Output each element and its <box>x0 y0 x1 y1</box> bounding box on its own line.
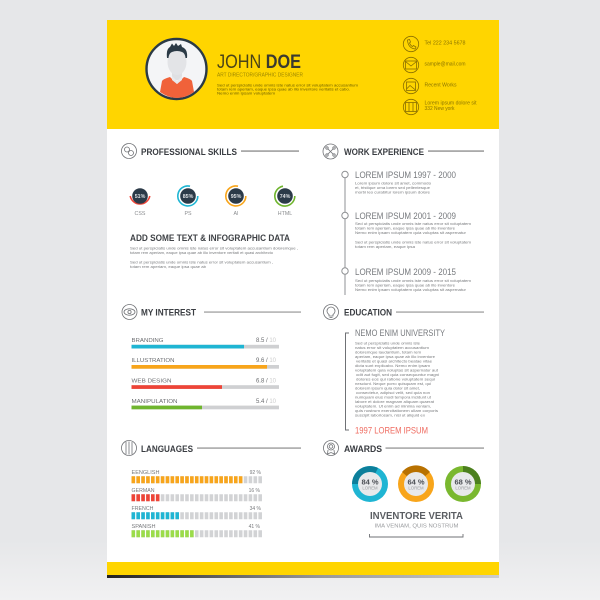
footer band <box>107 562 499 575</box>
education body text: quis nostrum exercitationem ullam corporis <box>355 408 438 413</box>
donut: award 2 <box>398 465 434 502</box>
bracket <box>346 333 349 430</box>
job 1 <box>355 170 456 194</box>
heading: PROFESSIONAL SKILLS <box>141 147 237 158</box>
education body text: dicta sunt explicabo. Nemo enim ipsam <box>355 363 431 368</box>
meter: spanish: SPANISH <box>132 524 156 530</box>
email: sample@mail.com <box>424 62 466 68</box>
donut: award 3 <box>445 466 481 502</box>
intro text <box>217 82 359 96</box>
donut: PS <box>178 186 198 217</box>
education body text: numquam eius modi tempora incidunt ut <box>355 394 432 400</box>
body text: Sed ut perspiciatis unde omnis iste natus error sit voluptatem accusantium doloremque , <box>130 246 298 250</box>
education dates: 1997 LOREM IPSUM <box>355 426 428 436</box>
bar: branding: BRANDING <box>132 338 164 344</box>
panel: awards <box>324 440 484 537</box>
bar: branding <box>132 338 279 348</box>
icon: envelope <box>403 57 419 73</box>
donut: award 1: LOREM <box>362 486 378 490</box>
donut: CSS: 51% <box>135 194 146 200</box>
timeline <box>342 171 348 295</box>
meter: german: GERMAN <box>132 488 155 494</box>
donut: AI <box>226 186 246 217</box>
education body text: dolorem ipsum quia dolor sit amet, <box>355 386 420 390</box>
sub heading: ADD SOME TEXT & INFOGRAPHIC DATA <box>130 233 290 243</box>
education body text: consectetur, adipisci velit, sed quia non <box>356 390 430 395</box>
icon: avatar portrait <box>146 39 206 99</box>
panel: header band <box>107 20 499 129</box>
recent works: Recent Works <box>424 82 457 88</box>
award title: INVENTORE VERITA <box>370 511 463 522</box>
job 2 <box>355 211 472 249</box>
panel: languages <box>122 440 301 534</box>
panel: professional skills <box>122 144 299 269</box>
heading: AWARDS <box>344 444 382 455</box>
panel: resume sheet <box>107 20 499 575</box>
heading: EDUCATION <box>344 308 392 318</box>
address <box>424 100 477 112</box>
donut: award 1 <box>352 466 388 502</box>
icon: map <box>403 99 419 115</box>
panel: education <box>324 304 484 436</box>
body text: Sed ut perspiciatis unde omnis iste natus error sit voluptatem accusantium , <box>130 260 273 264</box>
icon: eye <box>122 304 137 320</box>
donut: HTML <box>275 186 295 217</box>
body text: totam rem aperiam, eaque ipsa quae ab illo inventore veritati et quasi architecto <box>130 250 274 255</box>
panel: my interest <box>122 304 301 409</box>
bar: illustration: 9.6 / 10 <box>256 358 277 364</box>
education body text: aperiam, eaque ipsa quae ab illo inventore <box>355 354 436 359</box>
meter: french: 34 % <box>250 506 262 512</box>
heading: WORK EXPERIENCE <box>344 147 424 158</box>
job subtitle: ART DIRECTOR/GRAPHIC DESIGNER <box>217 72 303 78</box>
donut: AI: AI <box>233 211 239 217</box>
education body text: dolores eos qui ratione voluptatem sequi <box>356 376 435 382</box>
bar: manipulation: 5.4 / 10 <box>256 399 277 405</box>
meter: french <box>132 506 263 516</box>
bar: web design: 6.8 / 10 <box>256 378 277 384</box>
donut: PS: PS <box>184 211 192 217</box>
job 3: Sed ut perspiciatis unde omnis iste natus error sit voluptatem <box>355 278 472 283</box>
award subtitle: IMA VENIAM, QUIS NOSTRUM <box>374 524 459 530</box>
donut: award 2: LOREM <box>408 486 424 490</box>
job 3 <box>355 267 472 292</box>
meter: english: EENGLISH <box>132 470 160 476</box>
bar: manipulation <box>132 399 279 409</box>
icon: phone <box>403 36 419 52</box>
job 2: totam rem aperiam, eaque ipsa quae ab illo inventore <box>355 226 456 230</box>
meter: spanish <box>132 524 263 534</box>
job 2: Sed ut perspiciatis unde omnis iste natus error sit voluptatem <box>355 240 472 244</box>
education body text: odit aut fugit, sed quia consequuntur magni <box>356 372 439 377</box>
body text <box>130 246 298 269</box>
education body text: natus error sit voluptatem accusantium <box>355 345 430 350</box>
bar: illustration <box>132 358 279 369</box>
donut: HTML: HTML <box>278 211 292 217</box>
heading: MY INTEREST <box>141 308 196 318</box>
intro text: totam rem aperiam, eaque ipsa quae ab illo inventore veritatis et cabo. <box>217 86 350 92</box>
job 3: Nemo enim ipsam voluptatem quia voluptas sit aspernatur <box>355 287 467 292</box>
education body text: voluptatem quia voluptas sit aspernatur aut <box>355 368 439 372</box>
address: Lorem ipsum dolore sit <box>424 100 477 106</box>
panel: work experience <box>323 144 484 295</box>
job 2: Nemo enim ipsam voluptatem quia voluptas sit aspernatur <box>355 230 467 235</box>
meter: german <box>132 488 263 498</box>
name title: JOHN DOE <box>217 52 301 73</box>
heading: LANGUAGES <box>141 444 193 455</box>
donut: award 1: 84 % <box>361 478 379 486</box>
education body text: doloremque laudantium, totam rem <box>355 350 422 354</box>
education body text: veritatis et quasi architecto beatae vitae <box>356 358 433 364</box>
job 1: morbi leo curabitur lorem ipsum dolore <box>355 190 431 194</box>
icon: picture <box>403 78 419 94</box>
phone number: Tel 222 234 5678 <box>424 40 466 46</box>
bar: branding: 8.5 / 10 <box>256 338 277 344</box>
donut: PS: 85% <box>183 194 194 200</box>
bracket <box>370 534 463 537</box>
bar: illustration: ILLUSTRATION <box>132 358 175 364</box>
job 3: totam rem aperiam, eaque ipsa quae ab illo inventore <box>355 282 456 288</box>
job 2: Sed ut perspiciatis unde omnis iste natus error sit voluptatem <box>355 221 472 226</box>
education body text: nesciunt. Neque porro quisquam est, qui <box>355 381 431 386</box>
icon: ribbon <box>324 440 338 456</box>
meter: english: 92 % <box>250 470 262 476</box>
donut: CSS: CSS <box>135 211 146 217</box>
education body text: labore et dolore magnam aliquam quaerat <box>355 399 435 404</box>
icon: gears <box>122 144 136 158</box>
job 2: LOREM IPSUM 2001 - 2009 <box>355 211 456 222</box>
donut: CSS <box>130 188 150 217</box>
education body text <box>355 340 439 418</box>
icon: network <box>323 144 338 159</box>
icon: columns <box>122 440 136 456</box>
intro text: Nemo enim ipsam voluptatem <box>217 90 276 96</box>
meter: french: FRENCH <box>132 506 154 512</box>
bar: manipulation: MANIPULATION <box>132 399 178 405</box>
address: 332 New york <box>424 106 455 112</box>
education body text: suscipit laboriosam, nisi ut aliquid ex <box>355 412 425 418</box>
job 1: Lorem ipsum dolore sit amet, commodo <box>355 180 432 186</box>
meter: german: 16 % <box>249 488 261 494</box>
job 1: et, tristique urna lorem sed pellentesque <box>355 185 431 190</box>
donut: award 3: 68 % <box>454 478 472 486</box>
icon: light bulb <box>324 304 338 320</box>
meter: spanish: 41 % <box>249 524 261 530</box>
job 1: LOREM IPSUM 1997 - 2000 <box>355 170 456 181</box>
donut: award 3: LOREM <box>455 486 471 490</box>
education body text: Sed ut perspiciatis unde omnis iste <box>355 340 421 346</box>
donut: HTML: 74% <box>280 194 291 200</box>
donut: AI: 95% <box>231 194 242 200</box>
job 2: totam rem aperiam, eaque ipsa <box>355 244 416 249</box>
university name: NEMO ENIM UNIVERSITY <box>355 328 446 339</box>
meter: english <box>132 470 263 480</box>
job 3: LOREM IPSUM 2009 - 2015 <box>355 267 456 278</box>
bar: web design: WEB DESIGN <box>132 378 172 384</box>
donut: award 2: 64 % <box>407 478 425 486</box>
bar: web design <box>132 378 279 389</box>
intro text: Sed ut perspiciatis unde omnis iste natus error sit voluptatem accusantium <box>217 82 359 88</box>
education body text: voluptatem. Ut enim ad minima veniam, <box>355 404 431 408</box>
body text: totam rem aperiam, eaque ipsa quae ab <box>130 264 207 269</box>
